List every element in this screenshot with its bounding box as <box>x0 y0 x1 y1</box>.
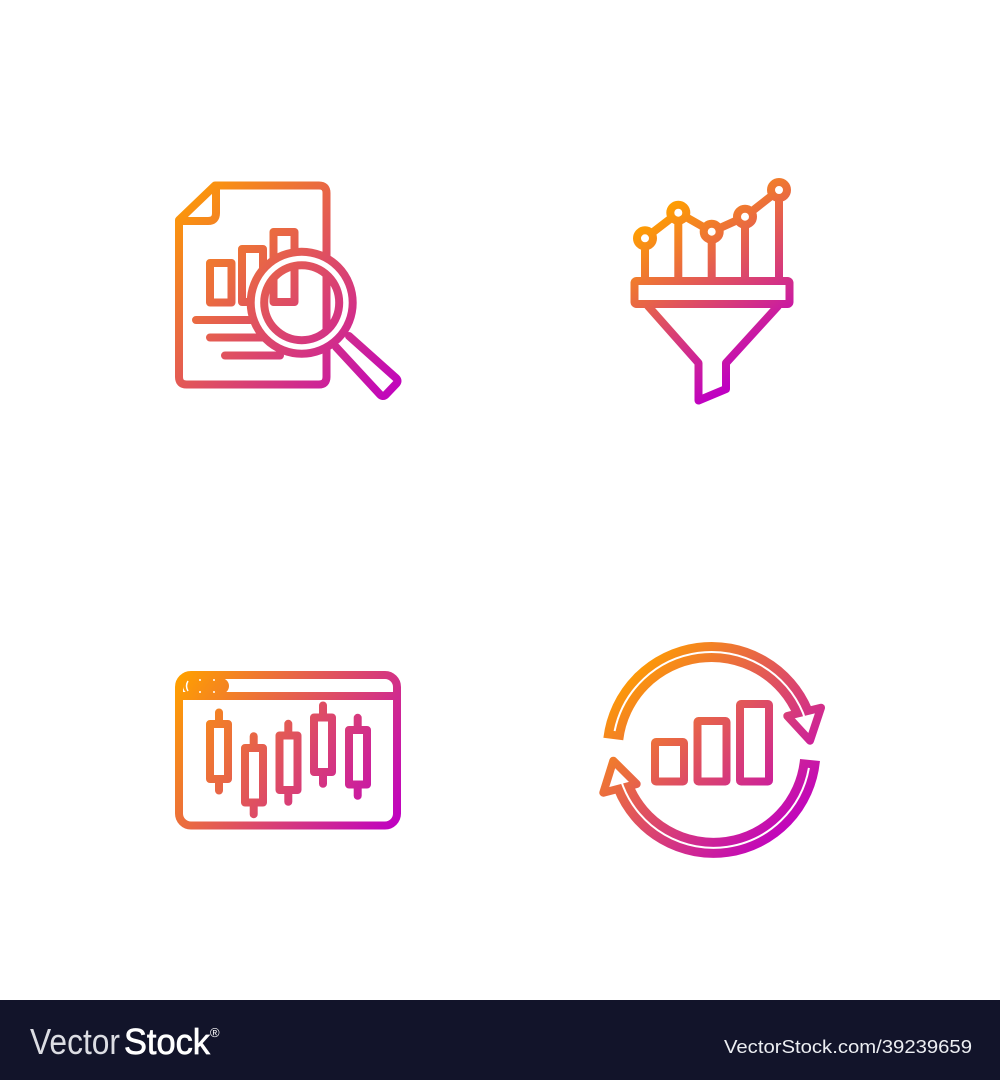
footer logo: ® <box>210 1025 220 1040</box>
icon: bar chart inside refresh arrows <box>603 652 821 848</box>
funnel rim <box>634 281 790 304</box>
right arrowhead <box>787 708 821 741</box>
browser title bar divider <box>179 692 397 700</box>
footer logo <box>30 1021 220 1062</box>
candle 1 <box>210 712 228 790</box>
candle 4 <box>314 706 332 784</box>
lens white gap <box>258 259 346 347</box>
bar 2 <box>698 721 726 782</box>
top arc inner gap <box>613 652 806 739</box>
document bar chart <box>210 232 294 302</box>
chart stems <box>645 198 779 281</box>
bottom arc inner gap <box>620 760 810 848</box>
chart trend line <box>645 190 779 238</box>
browser frame <box>179 675 397 826</box>
candle 3 <box>280 724 298 802</box>
footer image id: VectorStock.com/39239659 <box>724 1036 972 1057</box>
funnel body <box>648 306 778 400</box>
candle 2 <box>245 736 263 814</box>
footer logo: Vector <box>30 1021 120 1062</box>
magnifier inner ring <box>264 265 339 340</box>
footer logo: Stock <box>124 1021 211 1062</box>
icon: funnel filtering line chart <box>634 182 790 400</box>
icon: browser window with candlestick chart <box>179 675 397 826</box>
footer bar <box>0 1000 1000 1080</box>
icon: document with bar chart under magnifying glass <box>179 186 398 396</box>
chart data points <box>637 182 787 246</box>
bottom refresh arc <box>623 760 810 848</box>
magnifier handle <box>336 336 398 396</box>
document text lines <box>196 320 280 356</box>
bar 1 <box>655 742 684 782</box>
candle 5 <box>349 718 367 796</box>
magnifier outer ring <box>251 252 353 354</box>
left arrowhead <box>603 761 637 793</box>
top refresh arc <box>613 652 803 739</box>
document outline <box>179 186 326 384</box>
bar 3 <box>740 704 769 782</box>
browser buttons <box>183 678 229 694</box>
